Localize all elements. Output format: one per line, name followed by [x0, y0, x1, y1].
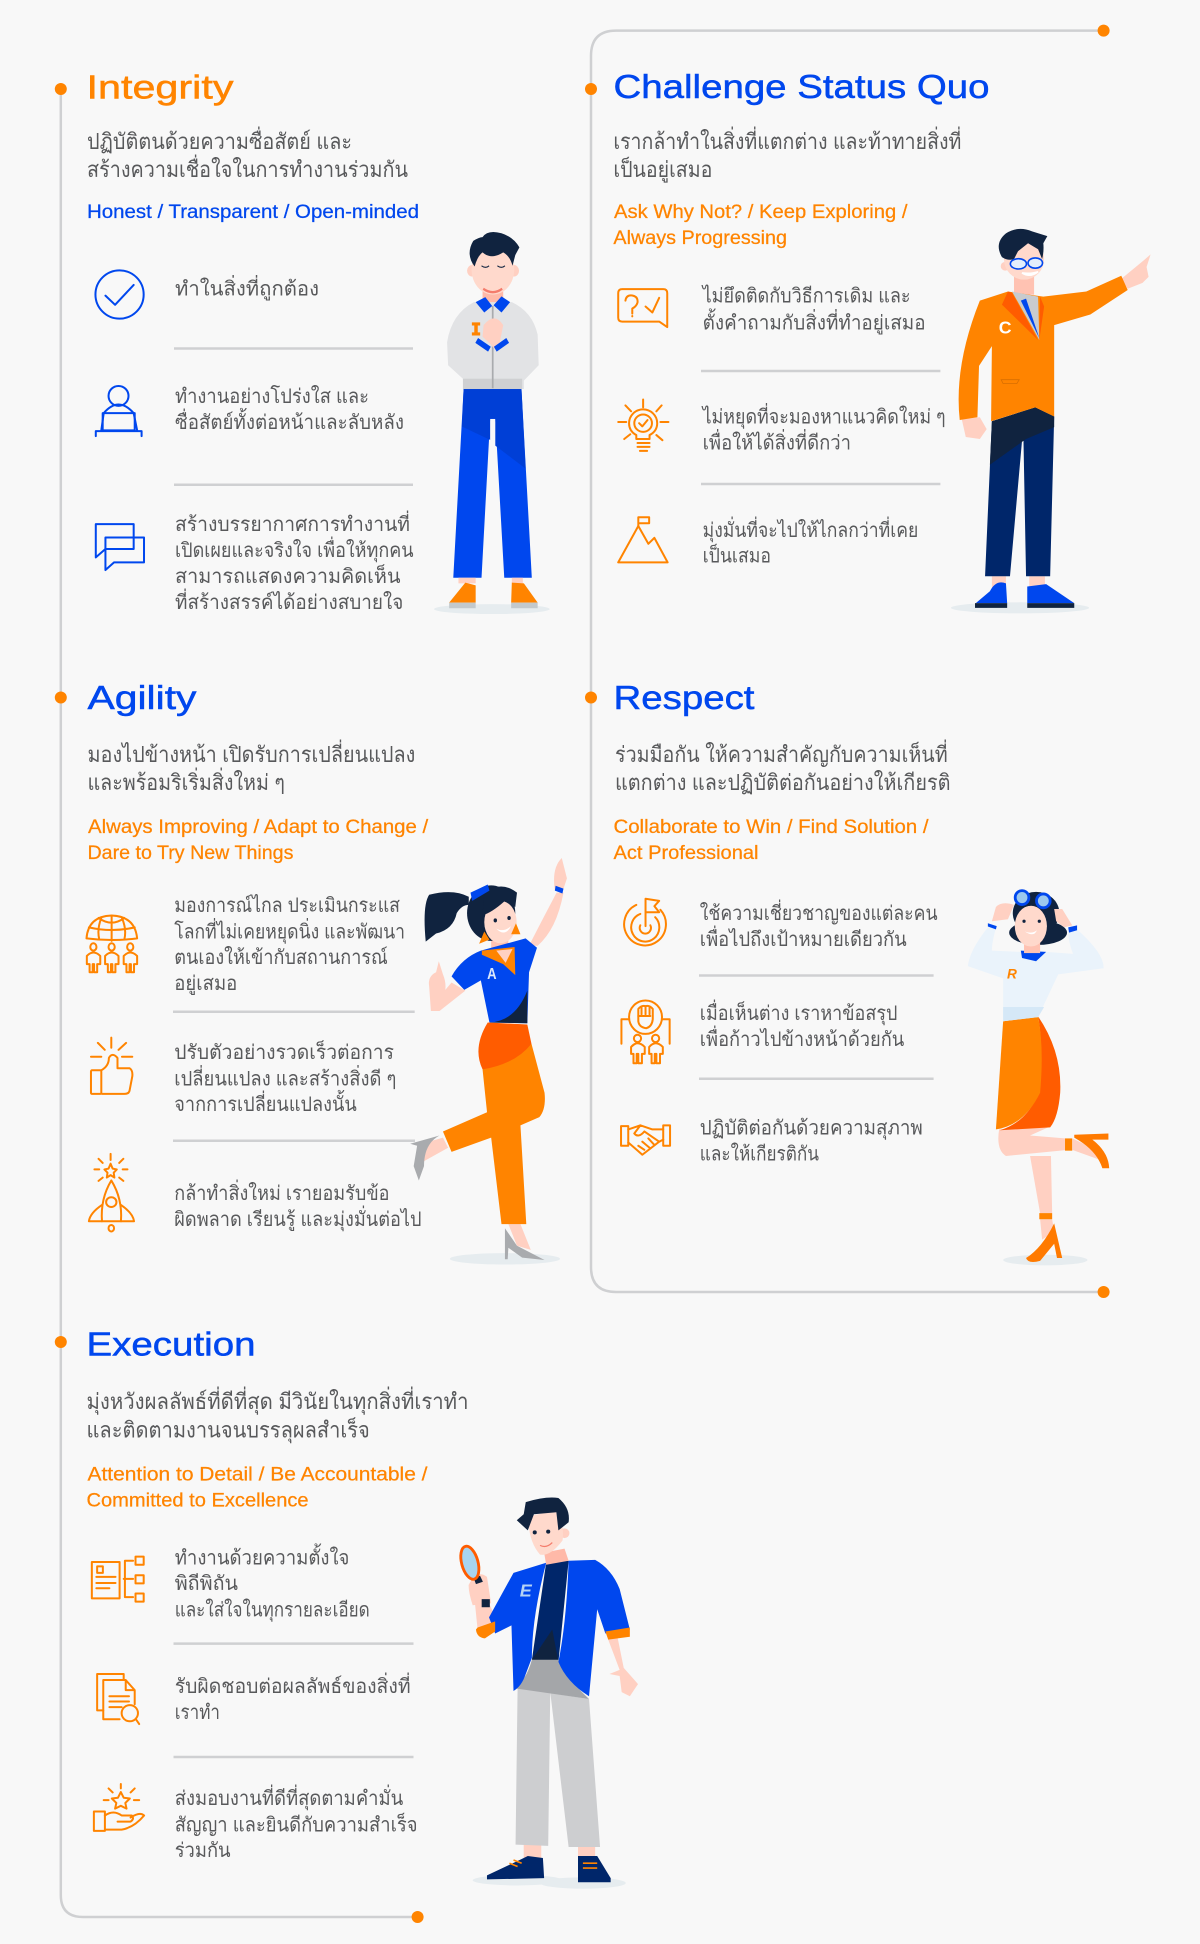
illustration: man with hands together [434, 232, 550, 614]
illustration: woman in orange trousers dancing: A [487, 966, 497, 984]
text: Respect item 2: เพื่อก้าวไปข้างหน้าด้วยกัน [700, 1025, 905, 1051]
text: Challenge item 3 [703, 516, 918, 567]
icon: handshake [621, 1125, 670, 1155]
text: Execution item 1 [175, 1544, 370, 1622]
keywords: Challenge [613, 202, 908, 249]
text: Integrity item 2: ซื่อสัตย์ทั้งต่อหน้าและลับหลัง [175, 408, 404, 434]
keywords: Execution: Committed to Excellence [86, 1490, 309, 1512]
icon: chat bubbles [96, 524, 144, 570]
text: Agility description [88, 739, 415, 795]
text: Execution item 3: ร่วมกัน [175, 1840, 231, 1862]
keywords: Agility [88, 817, 429, 864]
text: Challenge item 1 [701, 285, 926, 336]
left timeline [55, 83, 424, 1923]
text: Challenge description: เรากล้าทำในสิ่งที่แตกต่าง และท้าทายสิ่งที่ [613, 126, 961, 154]
keywords: Execution [86, 1465, 428, 1512]
text: Challenge description [613, 126, 961, 183]
panel: Integrity [86, 70, 550, 614]
text: Agility item 3 [174, 1179, 422, 1232]
text: Respect item 1: เพื่อไปถึงเป้าหมายเดียวกัน [700, 925, 907, 951]
illustration: man with magnifying glass: E [520, 1580, 533, 1600]
icon: rocket with star [89, 1154, 134, 1231]
text: Agility item 2 [174, 1039, 396, 1116]
icon: target with flag [624, 899, 666, 945]
text: Agility item 2: จากการเปลี่ยนแปลงนั้น [174, 1090, 357, 1116]
keywords: Agility: Always Improving / Adapt to Change / [88, 817, 429, 838]
text: Execution description: มุ่งหวังผลลัพธ์ที่ดีที่สุด มีวินัยในทุกสิ่งที่เราทำ [86, 1386, 468, 1415]
text: Respect description: แตกต่าง และปฏิบัติต่อกันอย่างให้เกียรติ [615, 770, 950, 795]
text: Integrity item 3: สร้างบรรยากาศการทำงานที่ [175, 510, 410, 536]
text: Execution description: และติดตามงานจนบรรลุผลสำเร็จ [86, 1415, 370, 1443]
panel: Agility [86, 680, 567, 1265]
text: Execution item 1: และใส่ใจในทุกรายละเอียด [175, 1598, 370, 1622]
icon: document with magnifier [97, 1674, 139, 1724]
text: Agility description: มองไปข้างหน้า เปิดรับการเปลี่ยนแปลง [88, 739, 415, 767]
text: Challenge item 2: เพื่อให้ได้สิ่งที่ดีกว่า [703, 429, 851, 455]
text: Integrity item 3: สามารถแสดงความคิดเห็น [175, 563, 401, 588]
text: Agility description: และพร้อมริเริ่มสิ่งใหม่ ๆ [88, 767, 285, 795]
text: Challenge item 2 [701, 403, 946, 455]
text: Challenge description: เป็นอยู่เสมอ [613, 155, 712, 183]
text: Integrity item 3 [175, 510, 414, 614]
text: Agility item 1 [174, 894, 405, 996]
keywords: Challenge: Ask Why Not? / Keep Exploring / [614, 202, 908, 223]
text: Execution description [86, 1386, 468, 1443]
right timeline [585, 25, 1110, 1298]
text: Agility item 1: โลกที่ไม่เคยหยุดนิ่ง และพัฒนา [174, 917, 405, 944]
heading: Execution: Execution [86, 1327, 256, 1364]
text: Execution item 1: พิถีพิถัน [175, 1573, 238, 1595]
text: Integrity item 2: ทำงานอย่างโปร่งใส และ [175, 385, 369, 408]
text: Integrity description: ปฏิบัติตนด้วยความซื่อสัตย์ และ [87, 126, 352, 154]
text: Integrity item 1: ทำในสิ่งที่ถูกต้อง [175, 275, 319, 302]
heading: Agility: Agility [88, 680, 197, 717]
text: Agility item 3: ผิดพลาด เรียนรู้ และมุ่งมั่นต่อไป [174, 1205, 422, 1232]
text: Challenge item 3: เป็นเสมอ [703, 542, 771, 567]
panel: Respect [614, 680, 1109, 1265]
illustration: man in orange blazer pointing: C [999, 318, 1012, 337]
icon: document tree [92, 1557, 144, 1602]
text: Respect item 2: เมื่อเห็นต่าง เราหาข้อสรุป [700, 999, 897, 1026]
keywords: Respect: Act Professional [614, 843, 758, 864]
heading: Integrity: Integrity [86, 70, 234, 106]
text: Respect item 3: และให้เกียรติกัน [700, 1142, 819, 1165]
text: Integrity description [87, 126, 408, 182]
text: Execution item 3: ส่งมอบงานที่ดีที่สุดตามคำมั่น [175, 1784, 404, 1811]
icon: fist and two people [621, 1000, 670, 1063]
keywords: Integrity: Honest / Transparent / Open-minded [87, 202, 419, 223]
text: Execution item 2 [175, 1672, 411, 1724]
icon: mountain flag [618, 517, 668, 562]
text: Challenge item 2: ไม่หยุดที่จะมองหาแนวคิดใหม่ ๆ [701, 403, 946, 430]
text: Respect item 3 [700, 1118, 923, 1165]
text: Respect item 3: ปฏิบัติต่อกันด้วยความสุภาพ [700, 1118, 923, 1141]
illustration: woman in orange skirt with sunglasses: R [1007, 966, 1017, 981]
text: Agility item 1: ตนเองให้เข้ากับสถานการณ์ [174, 946, 388, 969]
text: Respect item 1 [700, 899, 938, 951]
keywords: Agility: Dare to Try New Things [88, 843, 293, 864]
text: Agility item 2: เปลี่ยนแปลง และสร้างสิ่งดี ๆ [174, 1064, 396, 1090]
heading: Respect: Respect [614, 680, 755, 717]
icon: check circle [95, 270, 144, 319]
text: Respect item 1: ใช้ความเชี่ยวชาญของแต่ละคน [700, 899, 938, 925]
heading: Challenge Status Quo: Challenge Status Quo [614, 69, 990, 106]
text: Agility item 1: มองการณ์ไกล ประเมินกระแส [174, 894, 400, 917]
keywords: Challenge: Always Progressing [613, 228, 787, 249]
text: Respect description: ร่วมมือกัน ให้ความสำคัญกับความเห็นที่ [615, 739, 948, 767]
icon: star in hand [94, 1784, 144, 1831]
panel: Challenge Status Quo [613, 69, 1151, 613]
text: Integrity item 2 [175, 385, 404, 434]
text: Challenge item 1: ไม่ยึดติดกับวิธีการเดิม และ [701, 285, 911, 308]
illustration: man in orange blazer pointing [951, 229, 1151, 613]
keywords: Respect: Collaborate to Win / Find Solution / [614, 817, 929, 838]
keywords: Execution: Attention to Detail / Be Accountable / [88, 1465, 428, 1486]
icon: globe and people [86, 916, 137, 972]
text: Execution item 2: รับผิดชอบต่อผลลัพธ์ของสิ่งที่ [175, 1672, 411, 1698]
text: Integrity item 3: ที่สร้างสรรค์ได้อย่างสบายใจ [175, 588, 403, 614]
text: Respect item 2 [700, 999, 905, 1051]
icon: thumbs up [91, 1038, 132, 1094]
icon: person at laptop [96, 386, 142, 436]
text: Agility item 1: อยู่เสมอ [174, 973, 237, 996]
text: Execution item 3: สัญญา และยินดีกับความสำเร็จ [175, 1812, 418, 1837]
text: Agility item 3: กล้าทำสิ่งใหม่ เรายอมรับข้อ [174, 1179, 390, 1205]
text: Execution item 3 [175, 1784, 418, 1862]
text: Execution item 1: ทำงานด้วยความตั้งใจ [175, 1544, 349, 1570]
text: Integrity item 3: เปิดเผยและจริงใจ เพื่อให้ทุกคน [175, 536, 414, 563]
keywords: Respect [614, 817, 929, 864]
text: Respect description [615, 739, 950, 795]
text: Challenge item 3: มุ่งมั่นที่จะไปให้ไกลกว่าที่เคย [703, 516, 918, 543]
text: Agility item 2: ปรับตัวอย่างรวดเร็วต่อการ [174, 1039, 394, 1064]
illustration: man with magnifying glass [458, 1498, 638, 1889]
panel: Execution [86, 1327, 638, 1889]
text: Integrity description: สร้างความเชื่อใจในการทำงานร่วมกัน [87, 154, 408, 182]
text: Challenge item 1: ตั้งคำถามกับสิ่งที่ทำอยู่เสมอ [703, 308, 926, 336]
text: Execution item 2: เราทำ [175, 1702, 220, 1724]
illustration: woman in orange trousers dancing [410, 858, 567, 1265]
icon: light bulb [618, 399, 668, 451]
illustration: woman in orange skirt with sunglasses [968, 891, 1109, 1265]
icon: question and check bubble [618, 289, 667, 327]
